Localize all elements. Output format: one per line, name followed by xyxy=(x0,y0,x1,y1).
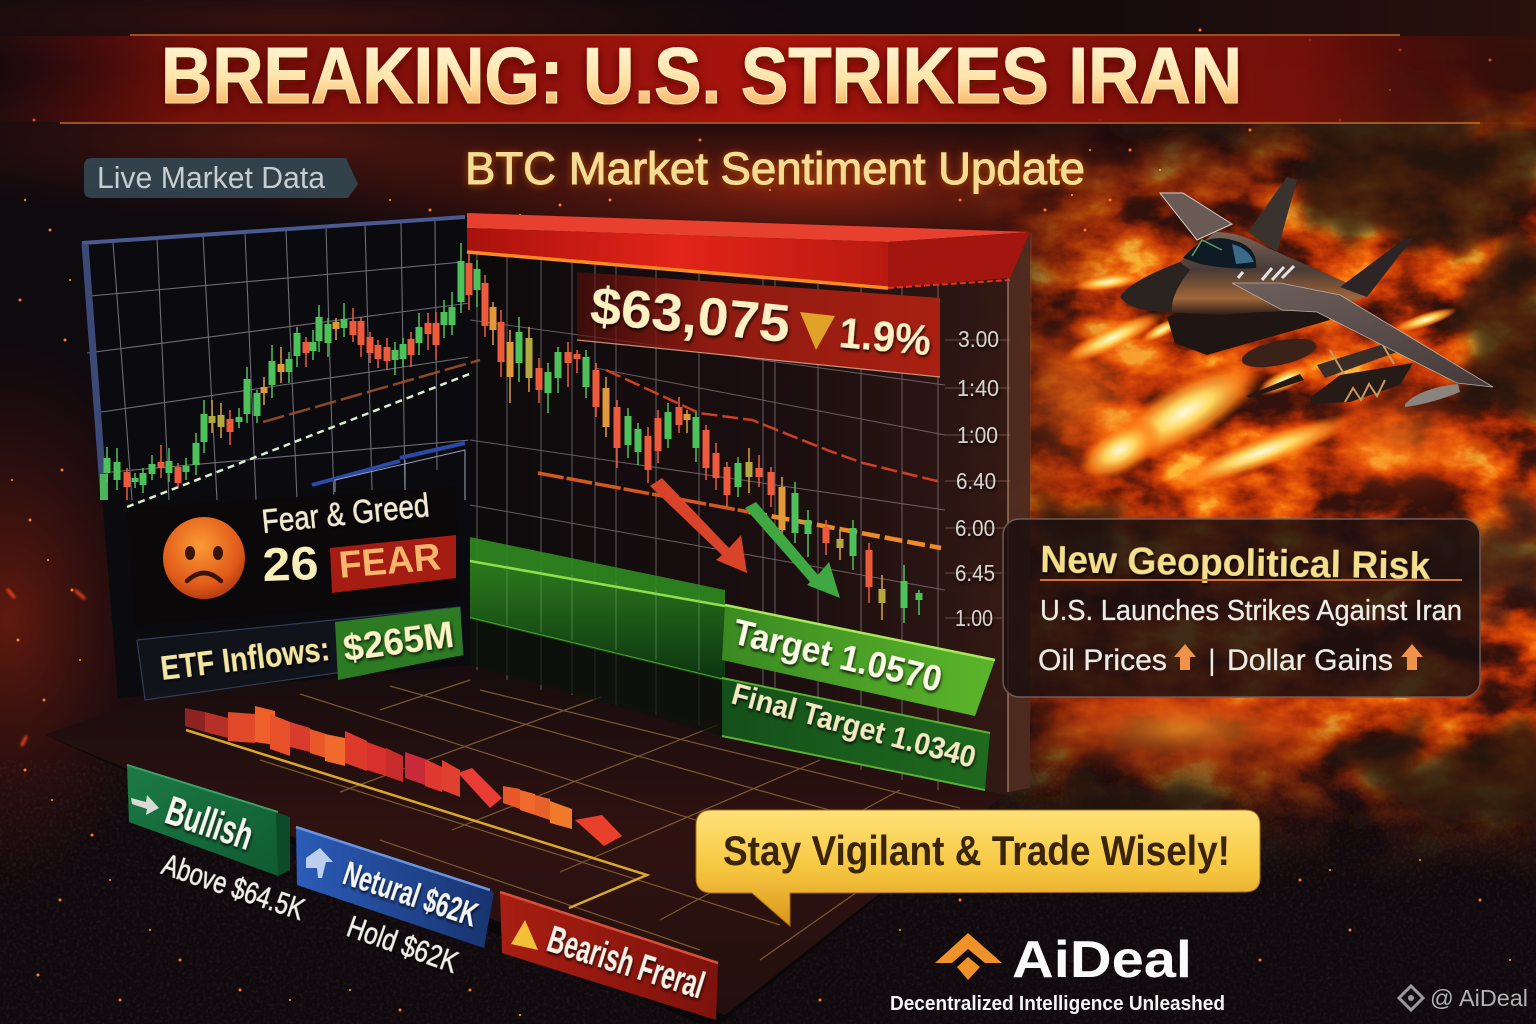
callout: stay vigilant: Stay Vigilant & Trade Wisely! xyxy=(723,827,1230,874)
fuselage stripes xyxy=(1238,266,1294,280)
dark smoke clouds xyxy=(960,65,1536,835)
vertical tail xyxy=(1248,177,1297,252)
target box 1: Target 1.0570 xyxy=(729,611,946,700)
brand logo xyxy=(935,931,1192,989)
axis labels: 6.45 xyxy=(955,560,995,586)
target box 2: Final Target 1.0340 xyxy=(728,676,980,775)
risk line 1: U.S. Launches Strikes Against Iran xyxy=(1040,595,1462,627)
panel heading: New Geopolitical Risk xyxy=(1040,539,1431,588)
panel: ETF inflows: ETF Inflows: xyxy=(158,630,332,688)
green target band xyxy=(470,537,725,737)
card: neutral: Netural $62K xyxy=(338,855,483,935)
risk line 2 xyxy=(1038,644,1423,677)
far wing xyxy=(1160,193,1232,240)
risk line 2: Oil Prices xyxy=(1038,644,1167,677)
panel: ETF inflows xyxy=(137,607,463,700)
card: bullish: Bullish xyxy=(160,787,259,859)
card: neutral xyxy=(296,827,494,948)
floor outline yellow xyxy=(186,730,647,908)
fear badge: FEAR xyxy=(337,536,442,587)
green down arrow xyxy=(745,502,840,598)
ETF value xyxy=(335,607,463,680)
callout: stay vigilant xyxy=(696,810,1260,926)
candlestick chart xyxy=(107,243,919,623)
red header box xyxy=(467,213,1030,288)
title band xyxy=(0,34,1536,124)
missile pods xyxy=(1239,333,1460,407)
icon: arrow xyxy=(131,795,159,815)
watermark: @ AiDeal xyxy=(1430,985,1528,1011)
small blue sub-chart frame xyxy=(312,443,465,500)
panel: geopolitical risk xyxy=(1003,519,1480,697)
nose shade xyxy=(1120,262,1190,312)
icon: up arrow xyxy=(306,848,333,878)
chart wall right xyxy=(467,215,1032,795)
axis labels xyxy=(955,326,999,631)
axis labels: 6.40 xyxy=(956,468,996,494)
down triangle xyxy=(800,312,835,350)
tag: live market data: Live Market Data xyxy=(97,160,326,195)
brand tagline: Decentralized Intelligence Unleashed xyxy=(890,993,1225,1015)
flame bursts below jet xyxy=(1056,269,1459,501)
jet fighter xyxy=(1120,177,1493,407)
fear and greed label: Fear & Greed xyxy=(260,486,431,540)
axis labels: 1:40 xyxy=(957,375,999,401)
panel: fear and greed xyxy=(127,486,460,625)
icon: sad face xyxy=(163,517,245,599)
main wing xyxy=(1232,283,1493,387)
axis labels: 6.00 xyxy=(955,515,995,541)
percent change: 1.9% xyxy=(837,309,933,365)
price value: $63,075 xyxy=(588,276,793,354)
index value: 26 xyxy=(261,536,319,591)
near tail xyxy=(1340,238,1413,297)
trend lines xyxy=(127,360,941,548)
axis labels: 1:00 xyxy=(957,422,998,448)
axis labels: 1.00 xyxy=(955,605,993,631)
belly and engines xyxy=(1167,293,1330,355)
ETF value: $265M xyxy=(341,614,456,669)
cockpit canopy xyxy=(1183,238,1256,268)
bullish condition: Above $64.5K xyxy=(158,846,309,927)
platform floor xyxy=(45,660,1005,1024)
fuselage xyxy=(1120,232,1368,315)
icon: warning triangle xyxy=(511,920,538,950)
risk line 2: Dollar Gains xyxy=(1227,644,1393,677)
subtitle: BTC Market Sentiment Update xyxy=(465,143,1085,194)
fire clouds backdrop xyxy=(977,40,1536,868)
risk line 2: | xyxy=(1208,644,1216,677)
floor red bars xyxy=(185,706,622,846)
icon: logo mark xyxy=(935,933,1002,980)
chart wall left xyxy=(82,215,470,698)
neutral condition: Hold $62K xyxy=(343,909,463,980)
price banner xyxy=(577,272,940,377)
brand logo: AiDeal xyxy=(1012,931,1192,989)
red down arrow xyxy=(650,478,747,573)
card: bullish xyxy=(127,765,290,876)
title: BREAKING: U.S. STRIKES IRAN xyxy=(161,31,1242,120)
axis labels: 3.00 xyxy=(958,326,999,352)
card: bearish xyxy=(500,892,718,1020)
